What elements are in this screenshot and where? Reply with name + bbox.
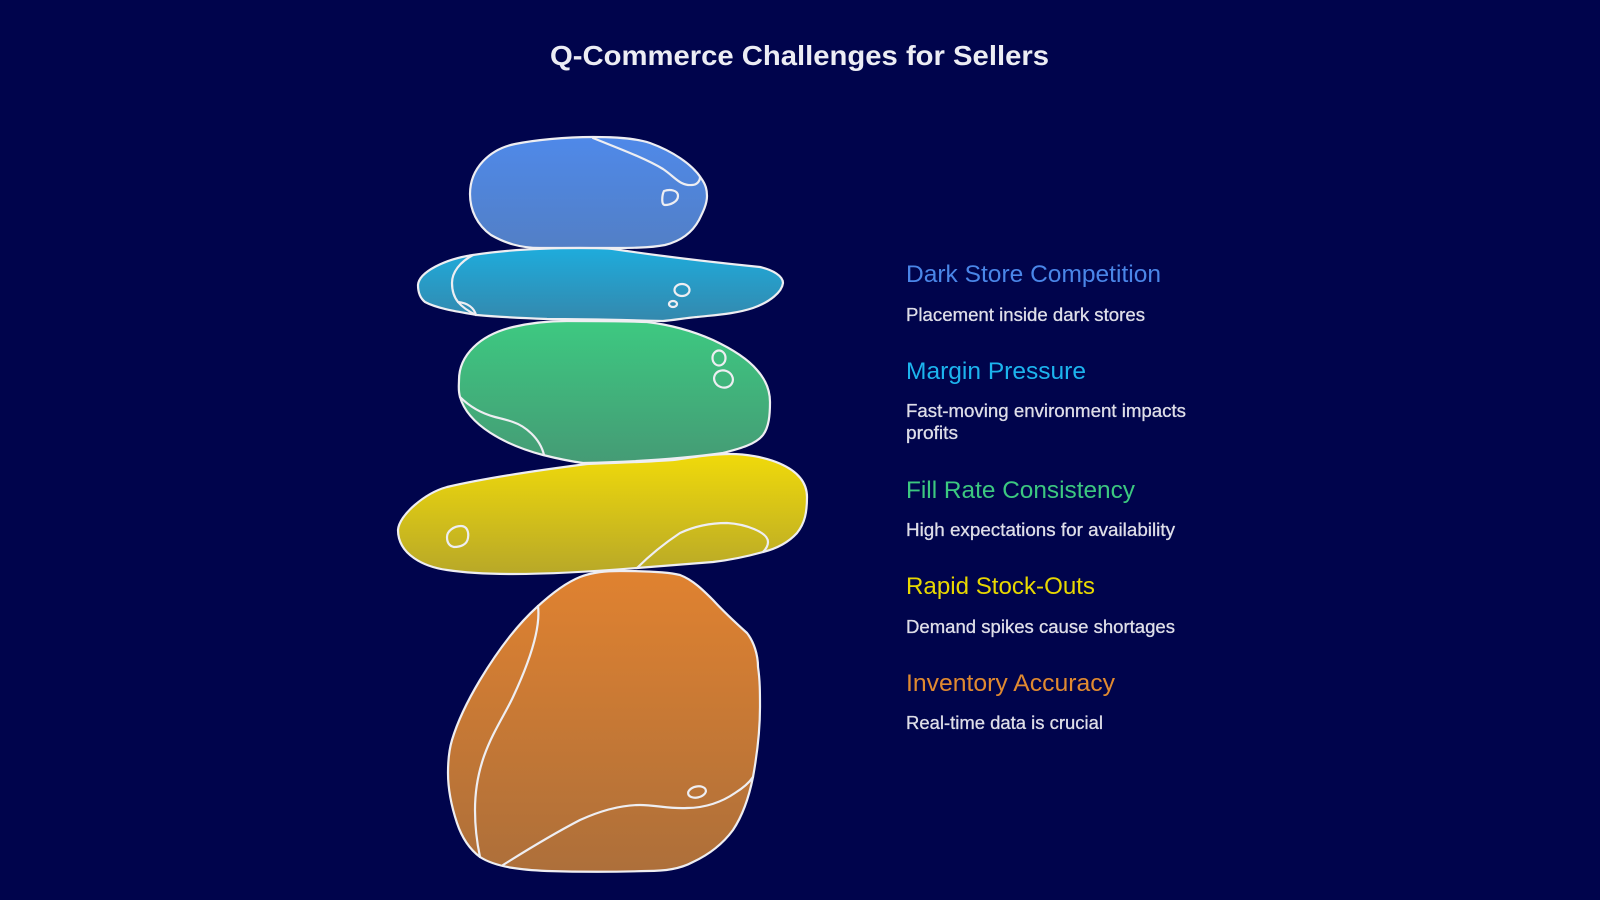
- item: margin pressure: Fast-moving environment impacts: [906, 401, 1186, 421]
- item: rapid stock-outs: [906, 573, 1175, 637]
- item: dark store competition: [906, 261, 1161, 325]
- stone: margin pressure (cyan): [418, 248, 783, 321]
- item: fill rate consistency: [906, 477, 1175, 540]
- item: inventory accuracy: [906, 670, 1115, 733]
- legend list: [906, 261, 1186, 733]
- item: margin pressure: profits: [906, 423, 958, 443]
- stone: inventory accuracy (orange): [448, 571, 760, 872]
- title: Q-Commerce Challenges for Sellers: [550, 40, 1049, 71]
- item: dark store competition: Dark Store Competition: [906, 261, 1161, 288]
- item: inventory accuracy: Inventory Accuracy: [906, 670, 1115, 697]
- item: rapid stock-outs: Rapid Stock-Outs: [906, 573, 1095, 600]
- item: margin pressure: Margin Pressure: [906, 358, 1086, 385]
- item: fill rate consistency: Fill Rate Consistency: [906, 477, 1135, 504]
- stone: dark store competition (blue): [470, 137, 707, 248]
- stone: rapid stock-outs (yellow): [398, 454, 807, 574]
- stacked stones illustration: [398, 137, 807, 872]
- item: fill rate consistency: High expectations for availability: [906, 520, 1175, 540]
- item: inventory accuracy: Real-time data is crucial: [906, 713, 1103, 733]
- item: margin pressure: [906, 358, 1186, 443]
- item: rapid stock-outs: Demand spikes cause shortages: [906, 617, 1175, 637]
- stone: fill rate consistency (green): [459, 321, 770, 463]
- item: dark store competition: Placement inside dark stores: [906, 305, 1145, 325]
